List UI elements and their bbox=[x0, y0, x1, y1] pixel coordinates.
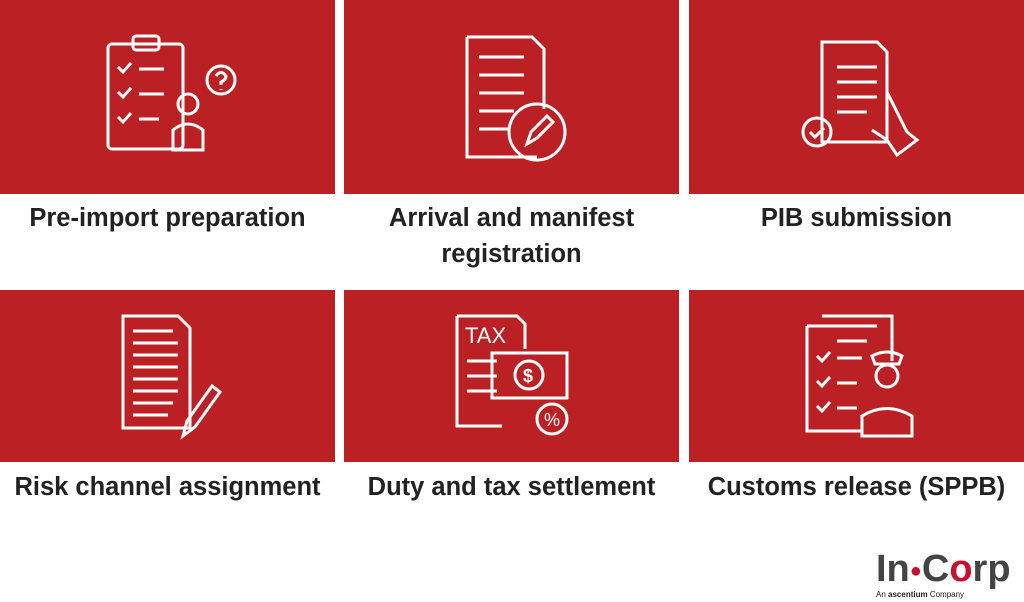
panel: pre-import preparation bbox=[0, 0, 335, 194]
logo: InCorp: In●Corp bbox=[876, 548, 1011, 590]
panel: arrival and manifest bbox=[344, 0, 679, 194]
label: duty: Duty and tax settlement bbox=[368, 473, 655, 501]
label: risk: Risk channel assignment bbox=[14, 473, 321, 501]
label: pre-import: Pre-import preparation bbox=[29, 204, 306, 232]
label: arrival: Arrival and manifest bbox=[389, 204, 634, 232]
label: PIB: PIB submission bbox=[761, 204, 952, 232]
icon: list with pencil bbox=[122, 314, 222, 440]
icon: tax with money: % bbox=[544, 410, 560, 430]
panel: customs release bbox=[689, 290, 1024, 462]
icon: checklist with officer bbox=[806, 314, 914, 438]
logo: InCorp: An ascentium Company bbox=[876, 590, 964, 599]
icon: tax with money bbox=[456, 314, 568, 436]
label: customs release: Customs release (SPPB) bbox=[708, 473, 1005, 501]
panel: PIB submission bbox=[689, 0, 1024, 194]
icon: clipboard with person bbox=[106, 34, 236, 152]
icon: document with pencil bbox=[466, 36, 566, 162]
panel: risk channel bbox=[0, 290, 335, 462]
label: arrival bbox=[389, 204, 634, 268]
label: arrival: registration bbox=[441, 240, 582, 268]
panel: duty and tax bbox=[344, 290, 679, 462]
icon: tax with money: $ bbox=[522, 366, 533, 386]
icon: tax with money: TAX bbox=[464, 323, 506, 348]
icon: document in hand with check bbox=[802, 40, 920, 158]
